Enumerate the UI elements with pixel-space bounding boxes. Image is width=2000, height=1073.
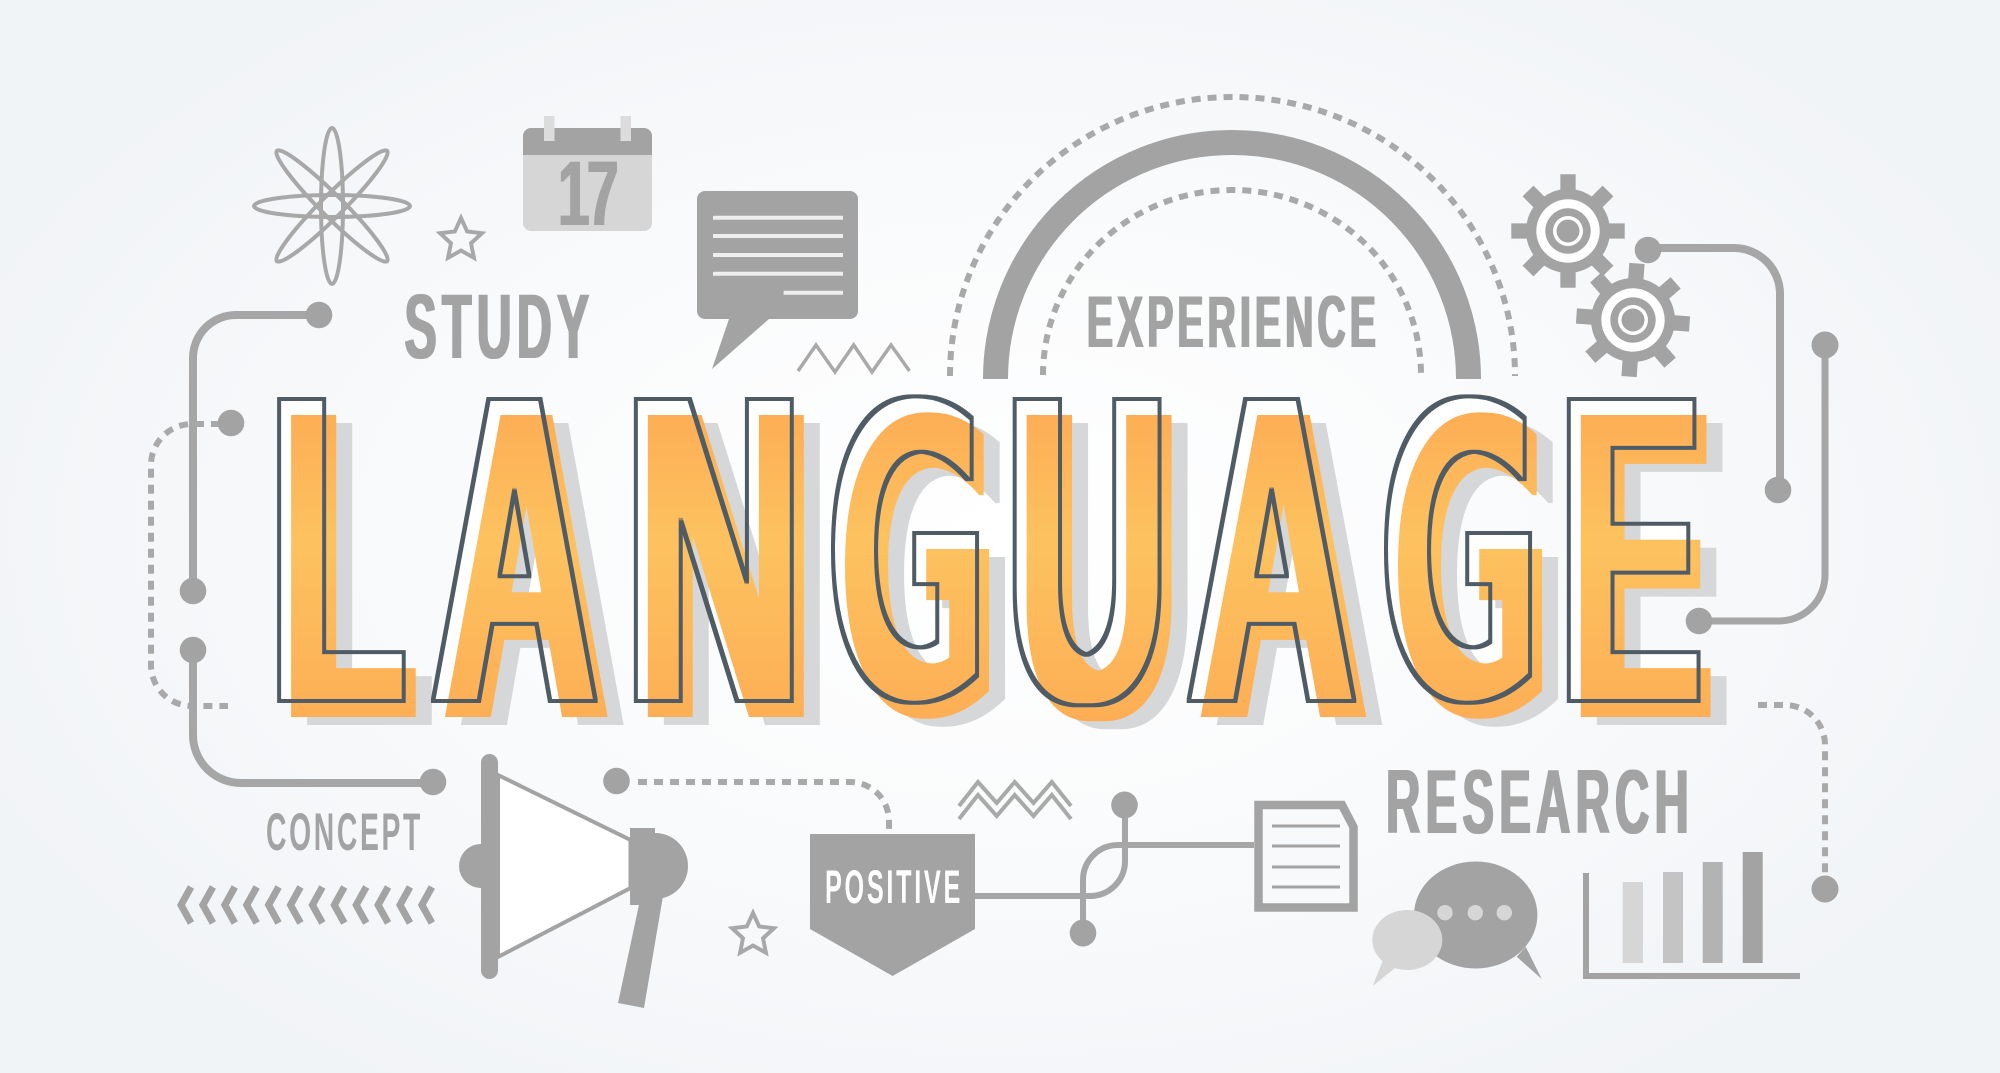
chevron row [181, 887, 432, 923]
icon: speech bubble with text lines [697, 191, 858, 369]
title: LANGUAGE: G [1378, 322, 1543, 793]
title: LANGUAGE: N [627, 304, 801, 795]
connector: top left [180, 302, 332, 604]
title: LANGUAGE: A [434, 303, 595, 794]
title: LANGUAGE: L [272, 305, 403, 795]
icon: document [1258, 805, 1354, 908]
title: LANGUAGE: E [1562, 304, 1700, 794]
bar chart [1583, 852, 1800, 979]
connector: bottom left [180, 637, 446, 795]
connector: right dashed [1758, 705, 1838, 902]
big arc [996, 142, 1468, 379]
title: LANGUAGE: A [1190, 304, 1353, 794]
icon: calendar [523, 116, 652, 245]
dashed arc inner [1043, 190, 1421, 375]
icon: star bottom [732, 913, 774, 953]
label: EXPERIENCE: EXPERIENCE [1087, 282, 1380, 363]
connector: right loop [1686, 332, 1838, 634]
zigzag top [798, 345, 910, 372]
connector: positive to document [975, 792, 1254, 946]
icon: chat bubbles [1372, 862, 1542, 986]
connector: dotted to positive [603, 768, 889, 833]
connector: gears to right [1635, 237, 1791, 503]
title: LANGUAGE [272, 303, 1700, 795]
badge: POSITIVE: POSITIVE [825, 860, 963, 913]
title: LANGUAGE: G [825, 322, 990, 793]
label: CONCEPT: CONCEPT [266, 803, 423, 862]
double zigzag [959, 782, 1071, 819]
label: STUDY: STUDY [404, 276, 594, 378]
icon: megaphone [459, 754, 688, 1008]
icon: star top [440, 218, 482, 258]
icon: gear upper [1511, 174, 1625, 288]
icon: atom [254, 128, 410, 284]
badge: POSITIVE [810, 834, 975, 976]
dashed arc outer [950, 97, 1515, 376]
connector: left dashed [151, 410, 244, 706]
label: RESEARCH: RESEARCH [1386, 752, 1694, 853]
title: LANGUAGE: U [1009, 304, 1166, 795]
icon: calendar: 17 [558, 143, 617, 245]
icon: gear lower [1572, 259, 1694, 381]
